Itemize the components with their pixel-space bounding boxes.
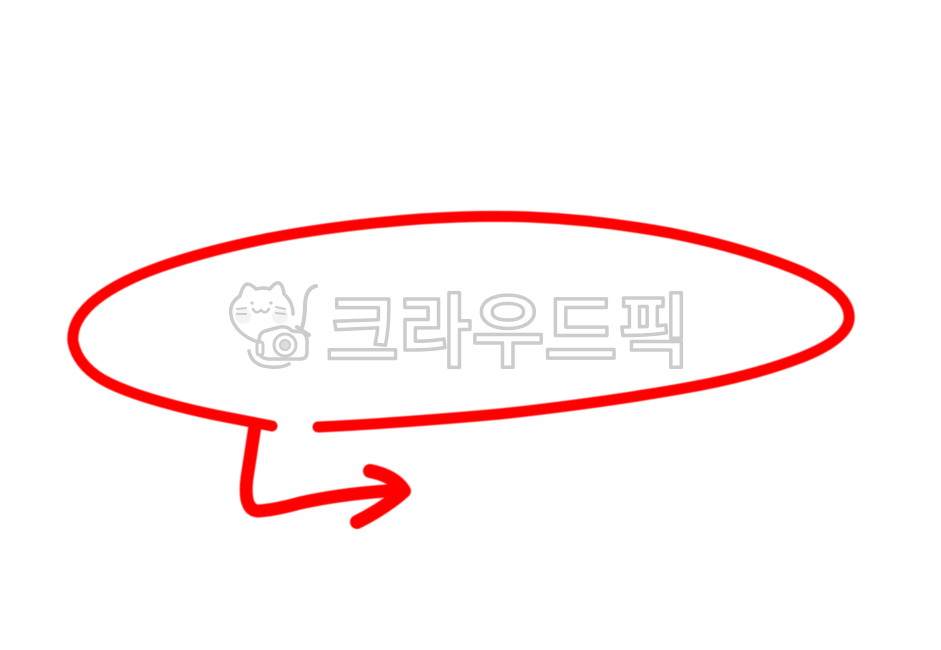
red arrow	[246, 426, 404, 522]
watermark logo: cat with camera	[231, 283, 316, 367]
red hand-drawn ellipse	[73, 216, 849, 427]
watermark wordmark: 크라우드픽	[326, 288, 690, 377]
